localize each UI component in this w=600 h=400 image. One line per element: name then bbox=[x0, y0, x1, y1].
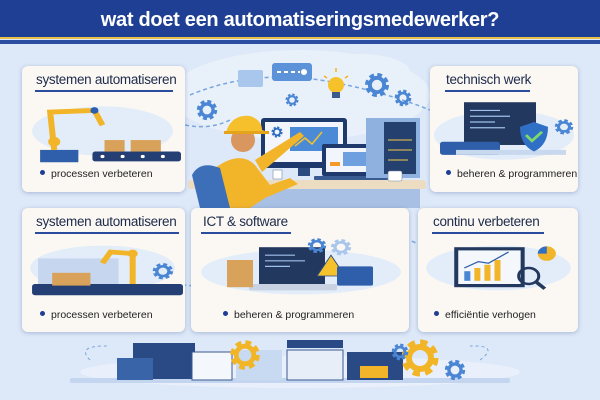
monitor bbox=[261, 118, 347, 176]
bullet text: efficiëntie verhogen bbox=[445, 309, 536, 321]
icon: lightbulb bbox=[324, 68, 348, 98]
heading: systemen automatiseren bbox=[36, 214, 176, 229]
cloud backdrop bbox=[80, 50, 520, 388]
illustration: robot arm conveyor bbox=[32, 106, 181, 162]
panel: bottom-left systemen automatiseren bbox=[22, 208, 185, 332]
bottom strip bbox=[70, 340, 510, 383]
server rack bbox=[366, 118, 420, 178]
desk bbox=[188, 180, 426, 208]
panel: top-right technisch werk bbox=[430, 66, 578, 192]
header bar bbox=[0, 0, 600, 44]
illustration: laptop with warning bbox=[201, 238, 401, 294]
heading: technisch werk bbox=[446, 72, 531, 87]
dashed connectors bbox=[170, 77, 440, 286]
cups bbox=[273, 170, 402, 181]
heading: systemen automatiseren bbox=[36, 72, 176, 87]
panel: ICT & software bbox=[191, 208, 409, 332]
illustration: robot line bbox=[30, 246, 183, 296]
illustration: code monitor and shield bbox=[434, 102, 574, 160]
bullet text: processen verbeteren bbox=[51, 309, 153, 321]
panel: continu verbeteren bbox=[418, 208, 578, 332]
bullet text: beheren & programmeren bbox=[457, 168, 577, 180]
panel: top-left systemen automatiseren bbox=[22, 66, 185, 192]
title: wat doet een automatiseringsmedewerker? bbox=[101, 9, 499, 31]
heading: continu verbeteren bbox=[433, 214, 539, 229]
icons top bbox=[238, 63, 312, 87]
chair bbox=[192, 165, 230, 208]
laptop bbox=[314, 144, 388, 180]
gears bbox=[199, 76, 409, 118]
illustration: chart monitor bbox=[426, 246, 571, 290]
bullet text: processen verbeteren bbox=[51, 168, 153, 180]
worker bbox=[210, 116, 304, 208]
heading: ICT & software bbox=[203, 214, 288, 229]
bullet text: beheren & programmeren bbox=[234, 309, 354, 321]
